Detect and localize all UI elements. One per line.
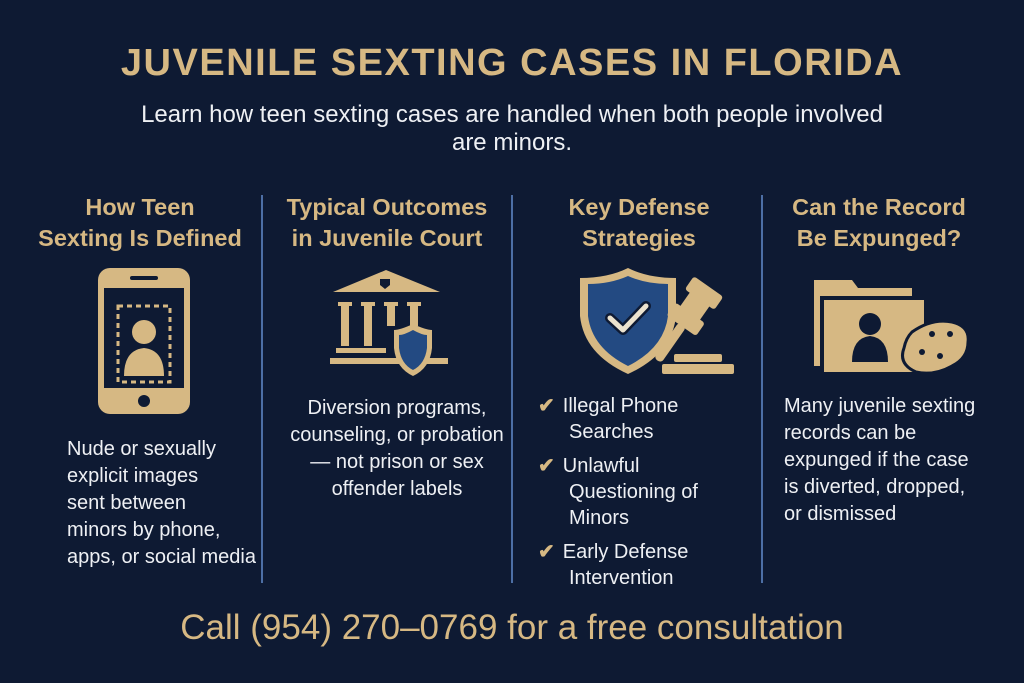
text: outcomes: offender labels bbox=[332, 478, 462, 500]
icon: folder and sponge bbox=[814, 280, 967, 372]
text: outcomes: — not prison or sex bbox=[310, 451, 484, 473]
panel: expungement bbox=[784, 194, 975, 525]
icon: shield and gavel bbox=[580, 268, 734, 374]
heading: definition: Sexting Is Defined bbox=[38, 225, 242, 251]
list: defenses: ✔ Unlawful bbox=[538, 455, 639, 477]
text: definition: apps, or social media bbox=[67, 546, 256, 568]
panel: outcomes bbox=[286, 194, 504, 500]
text: expungement bbox=[784, 395, 975, 525]
heading: defenses: Strategies bbox=[582, 225, 696, 251]
text: outcomes: counseling, or probation bbox=[290, 424, 504, 446]
panel: defenses bbox=[538, 194, 734, 589]
heading: outcomes: in Juvenile Court bbox=[292, 225, 482, 251]
heading: outcomes: Typical Outcomes bbox=[287, 194, 487, 220]
panel: definition bbox=[38, 194, 256, 568]
list: defenses: ✔ Early Defense bbox=[538, 541, 688, 563]
footer: call to action: Call (954) 270–0769 for a free consultation bbox=[180, 608, 844, 647]
heading: expungement bbox=[792, 194, 966, 251]
list: defenses: ✔ Illegal Phone bbox=[538, 395, 678, 417]
heading: definition: How Teen bbox=[85, 194, 195, 220]
text: definition: minors by phone, bbox=[67, 519, 220, 541]
text: expungement: expunged if the case bbox=[784, 449, 969, 471]
text: expungement: or dismissed bbox=[784, 503, 896, 525]
text: expungement: is diverted, dropped, bbox=[784, 476, 965, 498]
list: defenses: Searches bbox=[569, 421, 654, 443]
heading: outcomes bbox=[286, 194, 487, 251]
subtitle: are minors. bbox=[452, 129, 572, 156]
subtitle: Learn how teen sexting cases are handled when both people involved bbox=[141, 101, 883, 128]
text: definition bbox=[67, 438, 256, 568]
heading: expungement: Can the Record bbox=[792, 194, 966, 220]
list: defenses: Questioning of bbox=[569, 481, 698, 503]
text: definition: explicit images bbox=[67, 465, 198, 487]
text: expungement: records can be bbox=[784, 422, 916, 444]
heading: expungement: Be Expunged? bbox=[797, 225, 961, 251]
text: outcomes: Diversion programs, bbox=[308, 397, 486, 419]
heading: defenses: Key Defense bbox=[568, 194, 710, 220]
text: definition: Nude or sexually bbox=[67, 438, 216, 460]
list: defenses: Intervention bbox=[569, 567, 674, 589]
icon: courthouse bbox=[330, 270, 448, 376]
title: JUVENILE SEXTING CASES IN FLORIDA bbox=[121, 42, 903, 84]
text: expungement: Many juvenile sexting bbox=[784, 395, 975, 417]
text: definition: sent between bbox=[67, 492, 186, 514]
heading: defenses bbox=[568, 194, 710, 251]
subtitle bbox=[141, 101, 883, 156]
heading: definition bbox=[38, 194, 242, 251]
list: defenses: Minors bbox=[569, 507, 629, 529]
text: outcomes bbox=[290, 397, 504, 500]
list: defenses bbox=[538, 395, 698, 589]
icon: phone bbox=[98, 268, 190, 414]
